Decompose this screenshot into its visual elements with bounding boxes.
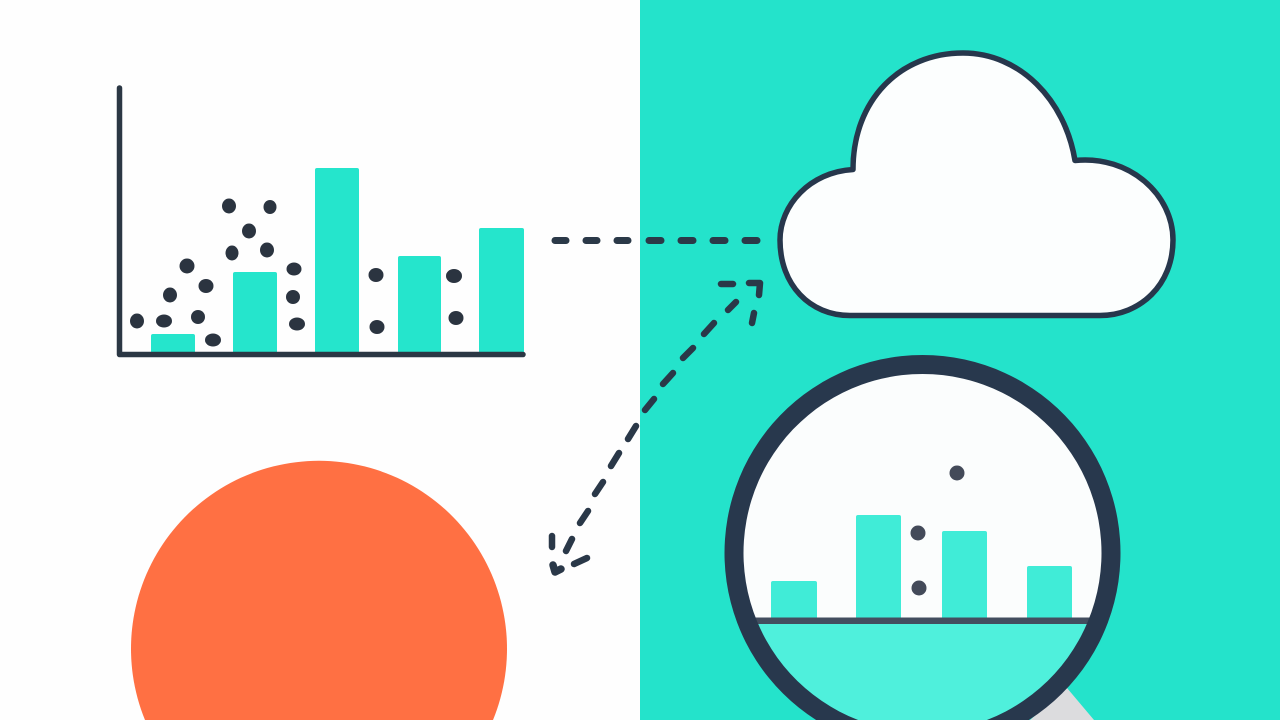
lens contents bbox=[744, 374, 1102, 720]
arrow: dashed line from chart to cloud bbox=[555, 237, 757, 244]
cloud icon bbox=[780, 53, 1173, 316]
orange circle bbox=[131, 461, 507, 720]
scatter dots bbox=[130, 198, 464, 346]
panel: left white background bbox=[0, 0, 640, 720]
lens baseline bbox=[756, 618, 1090, 624]
lens dots bbox=[910, 466, 964, 596]
bar chart with scattered dots bbox=[120, 88, 524, 354]
panel: right teal background bbox=[640, 0, 1280, 720]
magnifier handle bbox=[1030, 688, 1094, 720]
chart axes bbox=[120, 88, 523, 354]
arrow: two-way dashed diagonal between cloud and circle bbox=[552, 283, 760, 572]
lens lower teal area bbox=[758, 624, 1087, 720]
lens background bbox=[744, 374, 1102, 618]
chart bars bbox=[151, 168, 524, 352]
magnifying glass bbox=[725, 355, 1120, 720]
lens bars bbox=[771, 515, 1072, 618]
magnifier ring bbox=[725, 355, 1120, 720]
